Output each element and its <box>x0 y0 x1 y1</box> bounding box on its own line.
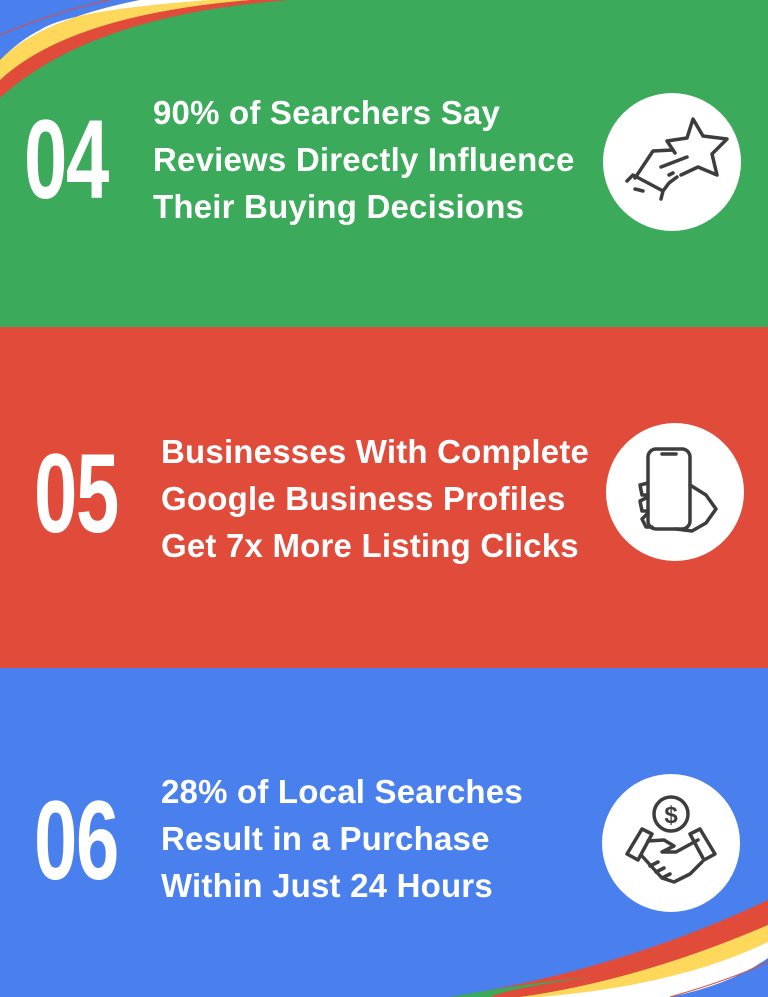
icon: hand with star <box>603 93 741 231</box>
panel: stat 06 <box>0 668 768 997</box>
heading 05: Get 7x More Listing Clicks <box>161 527 579 564</box>
heading 06 <box>161 773 523 904</box>
icon: handshake with dollar: $ <box>664 802 678 829</box>
heading 06: Within Just 24 Hours <box>161 867 493 904</box>
number 04: 04 <box>24 97 108 223</box>
icon: handshake with dollar <box>602 774 740 912</box>
heading 05 <box>161 433 589 564</box>
panel: stat 04 <box>0 0 768 327</box>
heading 05: Businesses With Complete <box>161 433 589 470</box>
decorative swoosh top-left <box>0 0 290 98</box>
decorative swoosh bottom-right <box>450 900 768 997</box>
heading 04: Reviews Directly Influence <box>153 141 575 178</box>
heading 05: Google Business Profiles <box>161 480 566 517</box>
icon: hand holding phone <box>606 423 744 561</box>
number 05: 05 <box>34 431 118 557</box>
heading 06: Result in a Purchase <box>161 820 490 857</box>
heading 04: Their Buying Decisions <box>153 188 524 225</box>
heading 04: 90% of Searchers Say <box>153 94 500 131</box>
heading 04 <box>153 94 575 225</box>
heading 06: 28% of Local Searches <box>161 773 523 810</box>
number 06: 06 <box>34 778 118 904</box>
panel: stat 05 <box>0 327 768 668</box>
